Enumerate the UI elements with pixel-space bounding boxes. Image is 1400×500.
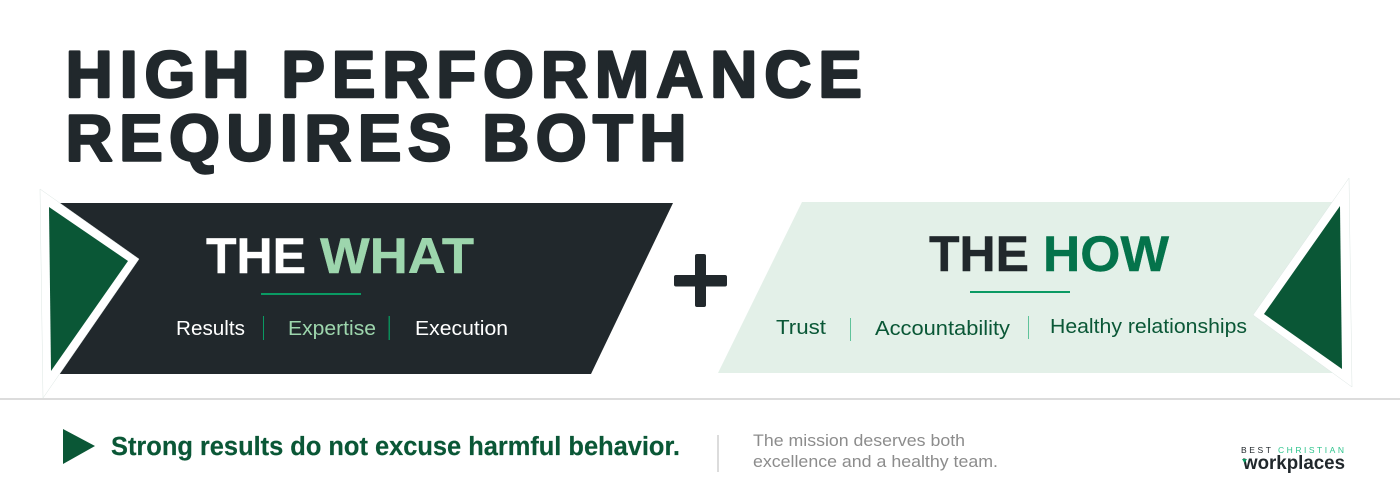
- icon: right triangle: [1253, 178, 1352, 387]
- logo: best christian workplaces: BEST: [1241, 445, 1271, 455]
- separator: [850, 318, 851, 341]
- heading: the how: HOW: [1043, 226, 1170, 282]
- label: execution: Execution: [415, 317, 508, 340]
- logo: best christian workplaces: CHRISTIAN: [1278, 445, 1344, 455]
- vertical divider: [717, 435, 719, 472]
- icon: left triangle: [40, 189, 139, 398]
- separator: [388, 316, 390, 340]
- label: trust: Trust: [776, 316, 826, 339]
- panel: the how: [718, 178, 1352, 387]
- label: results: Results: [176, 317, 245, 340]
- label: accountability: Accountability: [875, 317, 1011, 340]
- panel: the what: [40, 189, 673, 398]
- text: mission note: excellence and a healthy team.: [753, 452, 998, 471]
- divider line: [0, 398, 1400, 400]
- title: REQUIRES BOTH: [66, 102, 686, 174]
- heading underline: [261, 293, 361, 295]
- heading: the what: [206, 228, 474, 284]
- logo: best christian workplaces: workplaces: [1242, 453, 1345, 474]
- callout: strong results: Strong results do not excuse harmful behavior.: [111, 433, 680, 461]
- text: mission note: The mission deserves both: [753, 431, 965, 450]
- title: [66, 38, 862, 174]
- separator: [1028, 316, 1029, 339]
- heading: the what: THE: [206, 228, 306, 284]
- label: expertise: Expertise: [288, 317, 376, 340]
- label: healthy relationships: Healthy relationships: [1050, 315, 1247, 338]
- heading underline: [970, 291, 1070, 293]
- title: HIGH PERFORMANCE: [66, 38, 862, 111]
- text: mission note: [753, 431, 998, 471]
- separator: [263, 316, 264, 340]
- icon: bottom triangle: [63, 429, 95, 464]
- heading: the how: THE: [929, 226, 1029, 282]
- heading: the how: [929, 226, 1170, 282]
- icon: plus sign: [674, 254, 727, 307]
- heading: the what: WHAT: [320, 228, 474, 284]
